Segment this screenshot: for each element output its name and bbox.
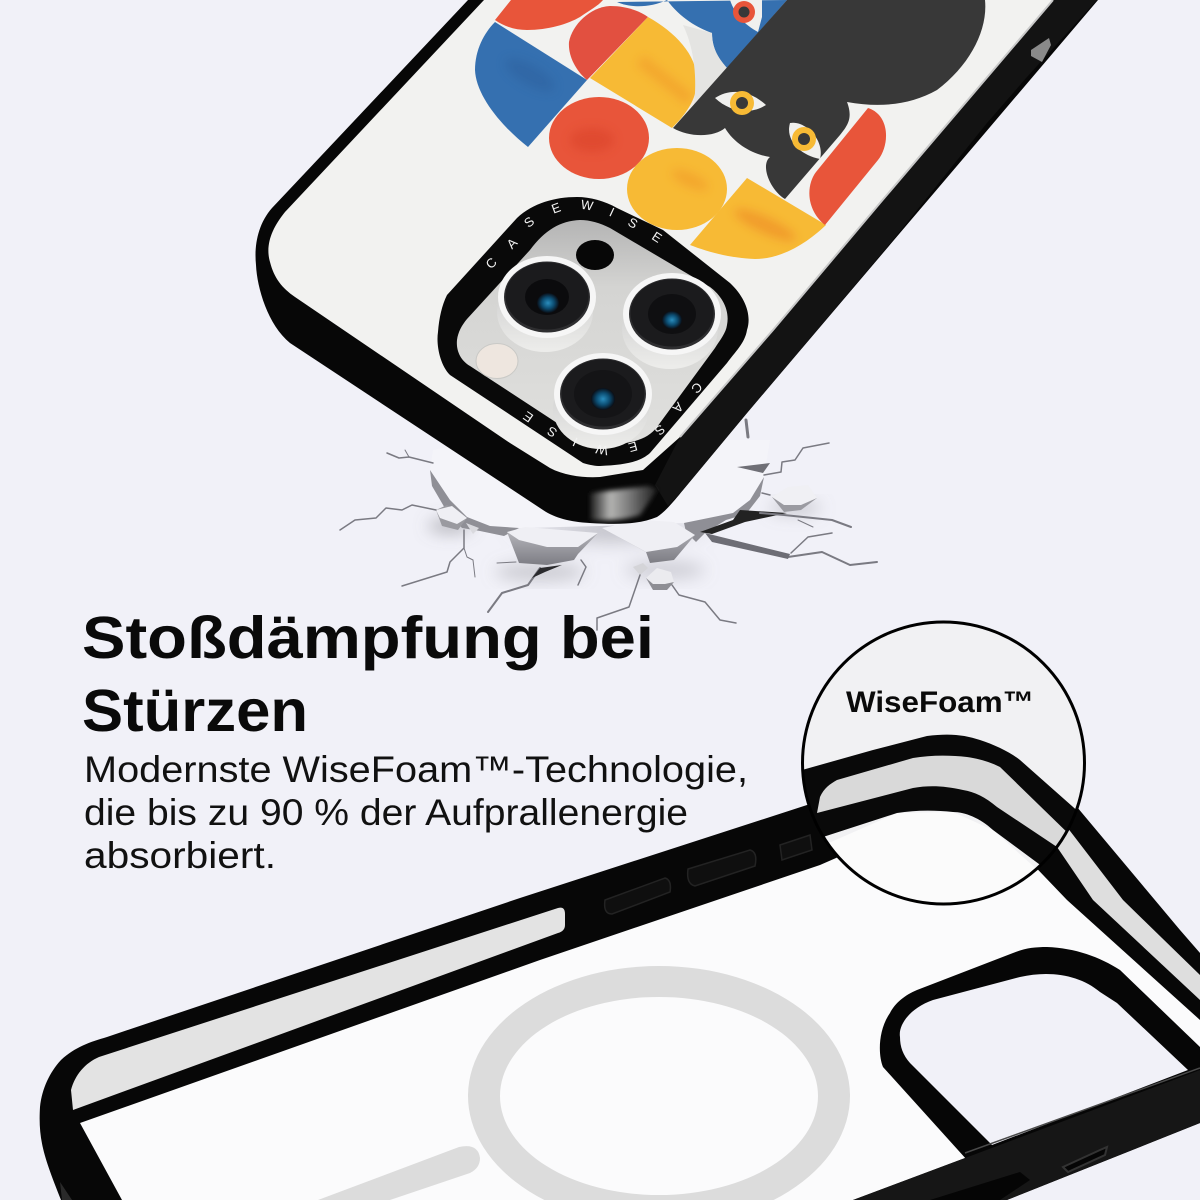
clear back panel <box>80 830 1200 1200</box>
red circle <box>549 97 649 179</box>
lens right <box>622 273 721 369</box>
lens upper left <box>497 256 596 352</box>
heading <box>82 605 654 744</box>
lower port <box>1063 1147 1107 1172</box>
camera ring <box>438 197 749 466</box>
cracked ground impact <box>340 420 877 630</box>
impact shadows <box>428 502 821 581</box>
heading: Stoßdämpfung bei <box>82 605 654 671</box>
phone with patterned case <box>256 0 1098 524</box>
right side of bumper <box>655 0 1097 506</box>
wedge crack lower <box>532 565 562 578</box>
rock fragment left <box>507 527 598 565</box>
body text: absorbiert. <box>84 835 276 876</box>
ring lettering top: CASEWISE <box>483 197 665 272</box>
paint texture <box>501 52 799 247</box>
wedge crack right <box>705 533 790 559</box>
case frame <box>40 760 1200 1200</box>
silver rim line <box>680 0 1053 437</box>
case bumper <box>256 0 1098 524</box>
side strip left <box>71 908 565 1110</box>
lower bumper edge <box>853 1070 1200 1200</box>
eye top <box>730 0 762 32</box>
eye left <box>715 91 766 115</box>
magnified bumper <box>804 734 1076 902</box>
red top shape <box>495 0 603 30</box>
body text <box>84 749 748 876</box>
volume button highlight <box>1031 38 1051 62</box>
artwork <box>475 0 985 259</box>
MagSafe ring <box>468 966 850 1200</box>
body text: Modernste WiseFoam™-Technologie, <box>84 749 748 790</box>
magnified black frame <box>804 734 1076 864</box>
side strip right <box>1057 827 1200 1000</box>
lens outline <box>802 622 1084 904</box>
raised slab <box>430 440 770 528</box>
flash <box>476 344 518 378</box>
lens background <box>802 622 1084 904</box>
yellow circle <box>627 148 727 230</box>
red quarter <box>569 6 648 80</box>
lidar sensor <box>576 240 614 270</box>
lower button <box>930 1172 1030 1200</box>
yellow half bottom <box>690 178 826 259</box>
grey shadow shape <box>683 25 727 105</box>
side buttons <box>605 835 812 914</box>
rock fragment centre <box>602 520 695 563</box>
camera opening <box>900 974 1188 1145</box>
lens bottom <box>553 353 652 449</box>
corner speaker hole <box>60 1182 72 1200</box>
lens label: WiseFoam™ <box>846 686 1034 719</box>
MagSafe alignment pill <box>318 1146 480 1200</box>
back panel <box>268 0 1053 477</box>
camera opening frame <box>880 947 1200 1160</box>
ring lettering bottom: CASEWISE <box>520 379 705 458</box>
WiseFoam callout lens <box>790 622 1090 920</box>
blue half circle <box>475 22 587 147</box>
slab broken edges <box>430 463 787 542</box>
corner highlight <box>590 486 658 520</box>
blue top shape <box>617 0 787 68</box>
lower edge highlight <box>965 1068 1200 1153</box>
magnified foam strip <box>817 756 1075 847</box>
red right shape <box>809 108 886 225</box>
transparent case interior view <box>40 760 1200 1200</box>
body text: die bis zu 90 % der Aufprallenergie <box>84 792 688 833</box>
small rock fragments <box>436 485 817 590</box>
yellow half <box>590 17 697 128</box>
camera plate <box>457 220 728 444</box>
clear area <box>830 812 1035 902</box>
crack lines <box>340 420 877 630</box>
dark cat <box>673 0 985 199</box>
eye right <box>789 123 821 159</box>
heading: Stürzen <box>82 678 308 744</box>
